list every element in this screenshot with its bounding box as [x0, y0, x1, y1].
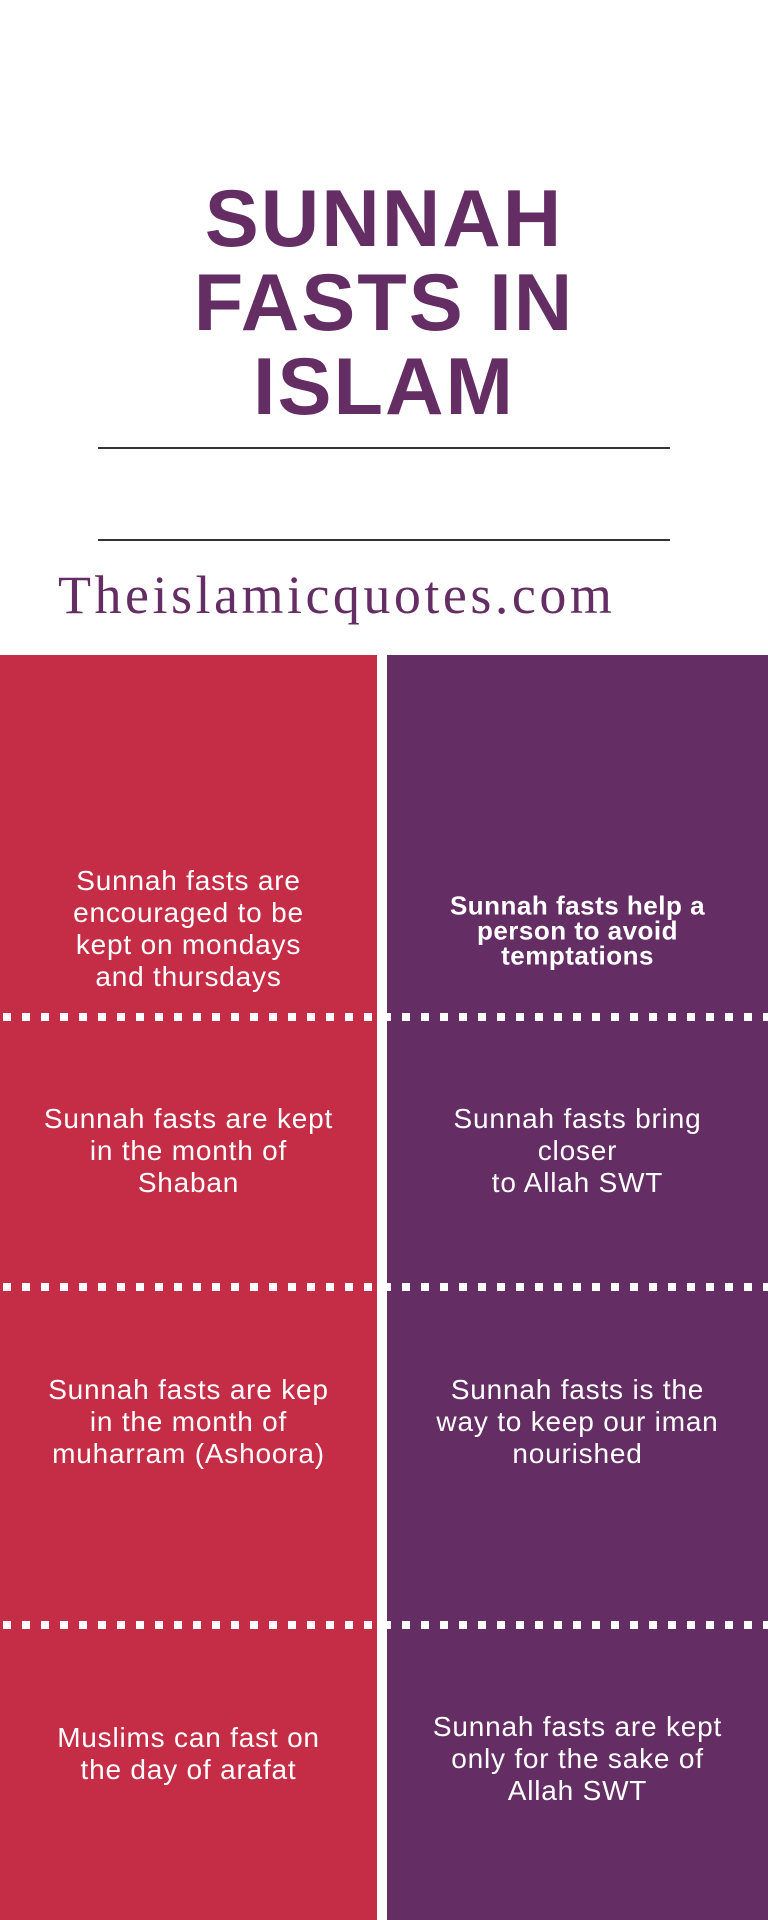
- text: right row 1: temptations: [501, 940, 654, 970]
- text: right row 1: person to avoid: [477, 916, 678, 946]
- text: left row 2: [44, 1103, 333, 1198]
- text: left row 3: in the month of: [90, 1406, 287, 1437]
- text: left row 1: [73, 865, 304, 992]
- text: left row 1: encouraged to be: [73, 897, 304, 928]
- text: left row 1: and thursdays: [95, 961, 282, 992]
- text: left row 2: in the month of: [90, 1135, 287, 1166]
- dotted divider 2: [0, 1283, 768, 1291]
- title: [194, 174, 574, 432]
- dotted divider 3: [0, 1621, 768, 1629]
- title: ISLAM: [253, 342, 515, 432]
- rule top: [98, 447, 670, 449]
- text: left row 1: Sunnah fasts are: [76, 865, 301, 896]
- text: left row 1: kept on mondays: [76, 929, 301, 960]
- text: right row 3: Sunnah fasts is the: [451, 1374, 704, 1405]
- text: right row 2: to Allah SWT: [492, 1167, 663, 1198]
- text: right row 4: only for the sake of: [451, 1743, 704, 1774]
- text: right row 2: Sunnah fasts bring: [454, 1103, 701, 1134]
- text: left row 4: [57, 1722, 320, 1785]
- text: right row 2: [454, 1103, 701, 1198]
- text: left row 2: Shaban: [138, 1167, 239, 1198]
- text: left row 3: [48, 1374, 329, 1469]
- text: right row 3: nourished: [512, 1438, 643, 1469]
- text: left row 4: the day of arafat: [81, 1754, 296, 1785]
- text: right row 4: Allah SWT: [508, 1775, 647, 1806]
- website: Theislamicquotes.com: [58, 565, 615, 625]
- text: right row 3: [436, 1374, 719, 1469]
- text: right row 2: closer: [538, 1135, 617, 1166]
- text: right row 3: way to keep our iman: [436, 1406, 719, 1437]
- panel: right: [387, 655, 768, 1920]
- title: SUNNAH: [205, 174, 563, 264]
- text: right row 1: Sunnah fasts help a: [450, 890, 705, 920]
- dotted divider 1: [0, 1013, 768, 1021]
- text: left row 3: Sunnah fasts are kep: [48, 1374, 329, 1405]
- text: left row 3: muharram (Ashoora): [52, 1438, 325, 1469]
- text: right row 4: [433, 1711, 722, 1806]
- title: FASTS IN: [194, 258, 574, 348]
- rule bottom: [98, 539, 670, 541]
- text: right row 1: [450, 890, 705, 970]
- text: left row 4: Muslims can fast on: [57, 1722, 320, 1753]
- text: left row 2: Sunnah fasts are kept: [44, 1103, 333, 1134]
- panel: left: [0, 655, 377, 1920]
- text: right row 4: Sunnah fasts are kept: [433, 1711, 722, 1742]
